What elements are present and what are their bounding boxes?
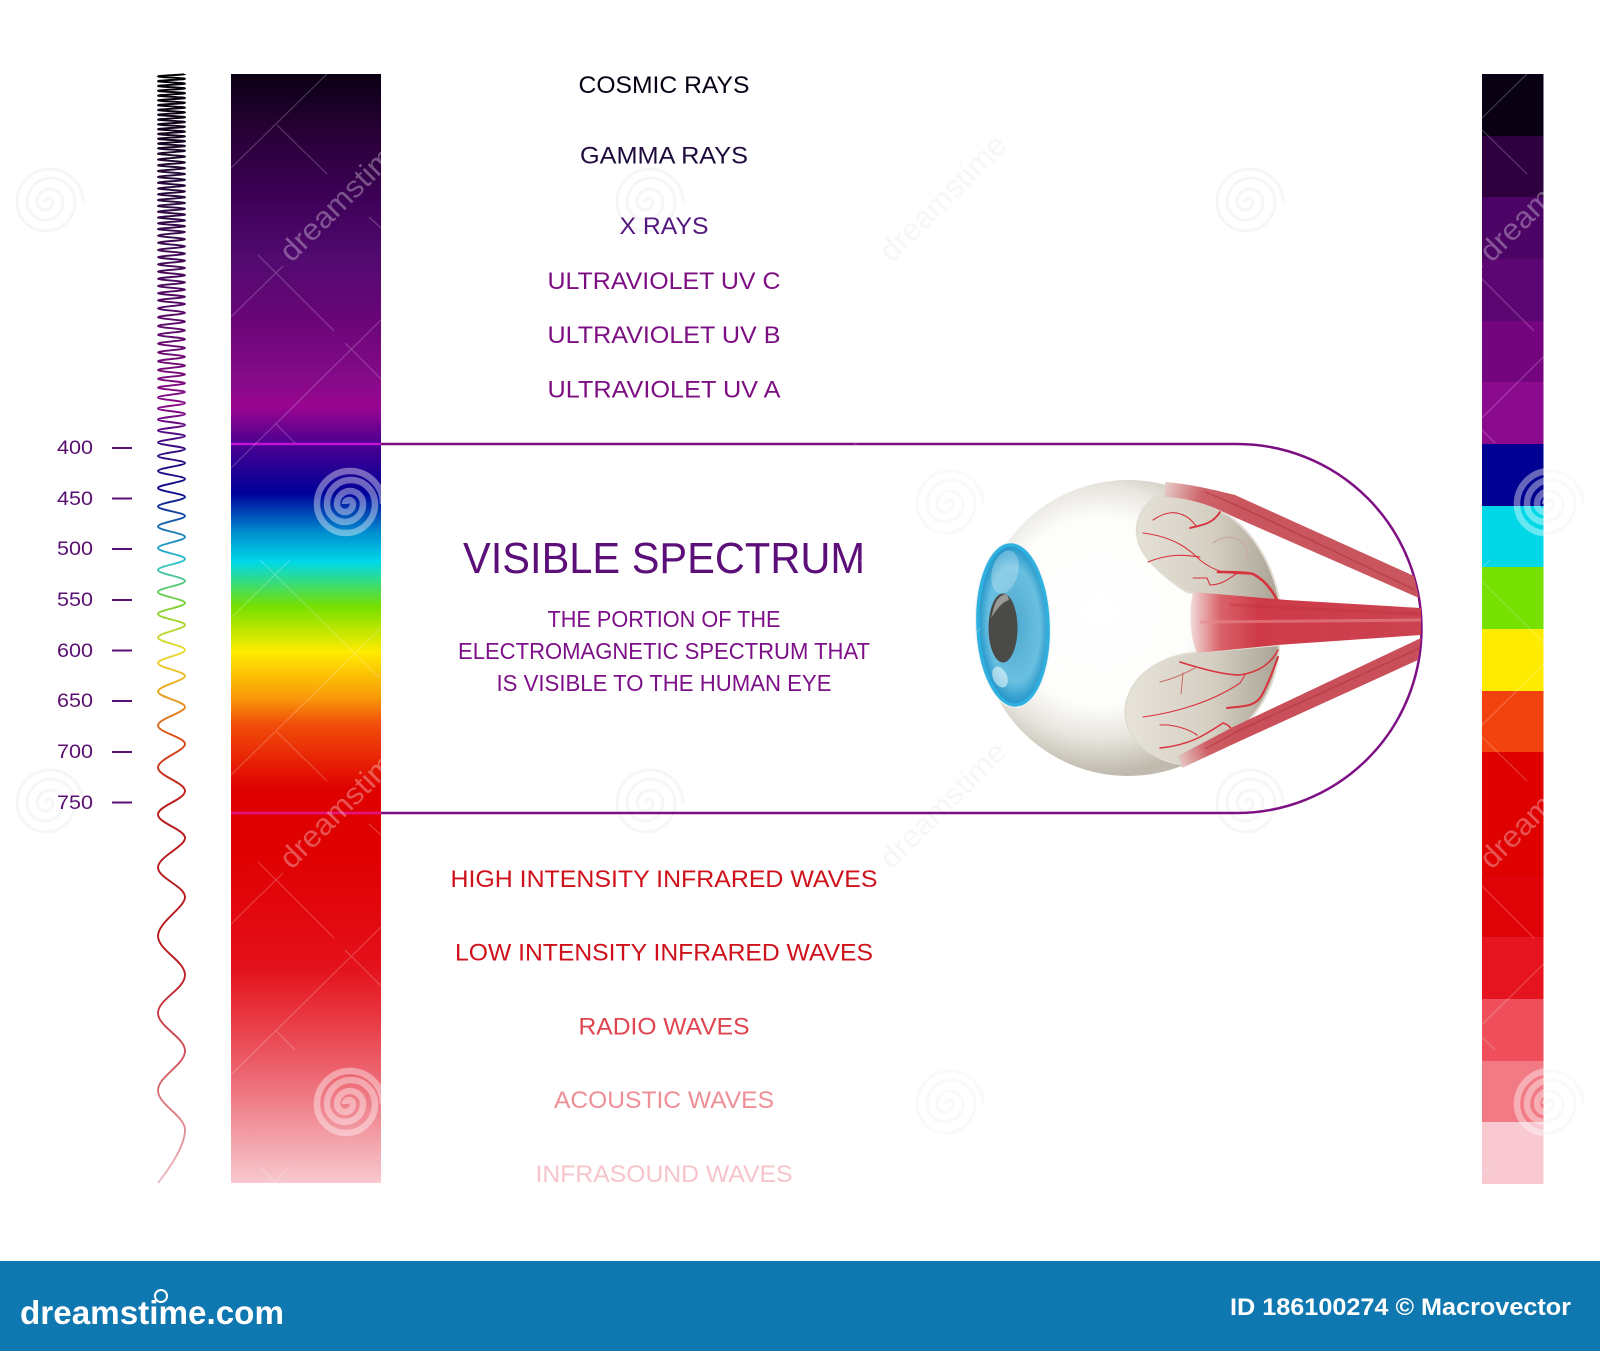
upper muscle: [1165, 482, 1419, 598]
central optic muscle: [1190, 592, 1421, 653]
labels above visible spectrum: X RAYS: [620, 213, 708, 240]
watermark overlay wordmarks: [273, 128, 1600, 875]
labels below visible spectrum: HIGH INTENSITY INFRARED WAVES: [450, 866, 878, 893]
description text: ELECTROMAGNETIC SPECTRUM THAT: [458, 638, 870, 664]
tick labels: 450: [57, 488, 93, 510]
footer logo spiral: [155, 1290, 167, 1302]
footer image id: ID 186100274 © Macrovector: [1230, 1294, 1571, 1321]
visible range top marker on bar: [231, 443, 381, 445]
watermark overlay wordmarks: dreamstime: [873, 735, 1013, 875]
tick labels: 750: [57, 792, 93, 814]
lower muscle: [1178, 638, 1421, 768]
heading: visible spectrum: VISIBLE SPECTRUM: [463, 534, 865, 583]
tick marks: [112, 448, 132, 802]
watermark overlay spirals: [317, 471, 1583, 1133]
labels above visible spectrum: GAMMA RAYS: [580, 142, 748, 170]
lower back lobe: [1125, 645, 1279, 764]
description text: IS VISIBLE TO THE HUMAN EYE: [496, 670, 832, 696]
tick labels: 550: [57, 589, 93, 611]
tick labels: 650: [57, 690, 93, 712]
watermark overlay wordmarks: dreamstime: [873, 128, 1013, 268]
footer bar: [0, 1261, 1600, 1351]
tick labels: 400: [57, 437, 93, 459]
visible spectrum outline: [381, 444, 1422, 813]
watermark overlay wordmarks: dreamstime: [273, 735, 413, 875]
tick labels: [57, 437, 93, 814]
wavelength scale: [57, 437, 132, 814]
icon: human eye with muscles: [972, 480, 1421, 776]
labels below visible spectrum: [450, 866, 878, 1188]
tick labels: 600: [57, 640, 93, 662]
tick labels: 700: [57, 741, 93, 763]
tick labels: 500: [57, 538, 93, 560]
blood vessels: [1143, 512, 1278, 748]
labels above visible spectrum: [548, 72, 781, 404]
labels above visible spectrum: ULTRAVIOLET UV A: [548, 376, 781, 404]
labels below visible spectrum: ACOUSTIC WAVES: [554, 1087, 774, 1114]
upper back lobe: [1137, 494, 1280, 605]
watermark underlay: faint spirals on white: [17, 169, 1583, 1133]
watermark overlay wordmarks: dreamstime: [273, 128, 413, 268]
cornea highlights: [987, 547, 1023, 690]
cornea rim: [972, 541, 1054, 709]
eyeball: [980, 480, 1276, 776]
labels above visible spectrum: COSMIC RAYS: [578, 72, 750, 99]
stepped spectrum bar: [1482, 74, 1544, 1184]
labels below visible spectrum: INFRASOUND WAVES: [536, 1161, 792, 1188]
wave of decreasing frequency: [158, 74, 185, 1183]
gradient spectrum bar: [231, 74, 381, 1183]
description text: THE PORTION OF THE: [548, 606, 780, 632]
pupil: [988, 594, 1018, 662]
visible range bottom marker on bar: [231, 812, 381, 814]
description text: [458, 606, 870, 696]
footer logo text: dreamstime.com: [20, 1294, 284, 1331]
labels above visible spectrum: ULTRAVIOLET UV C: [548, 268, 780, 295]
pupil highlight: [991, 594, 1009, 618]
labels below visible spectrum: LOW INTENSITY INFRARED WAVES: [455, 940, 873, 966]
labels above visible spectrum: ULTRAVIOLET UV B: [548, 322, 780, 349]
watermark overlay lines: [231, 21, 1581, 1285]
labels below visible spectrum: RADIO WAVES: [578, 1014, 750, 1040]
iris: [975, 544, 1051, 706]
